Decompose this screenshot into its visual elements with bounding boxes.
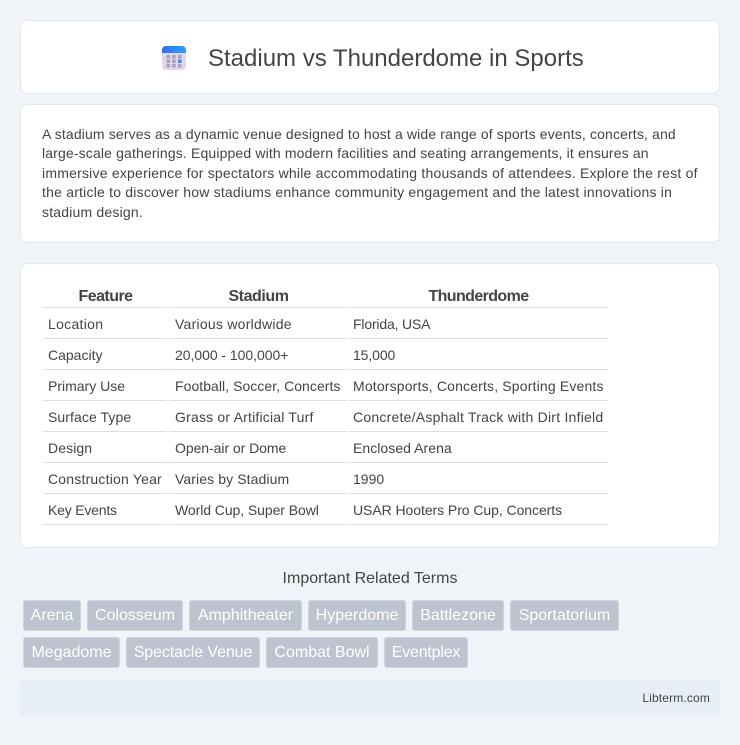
table row: surface type: Grass or Artificial Turf xyxy=(175,409,314,425)
intro text: large-scale gatherings. Equipped with modern facilities and seating arrangements, it ensures an xyxy=(42,145,649,161)
table row: key events xyxy=(43,502,608,525)
intro text: immersive experience for spectators while accommodating thousands of attendees. Explore the rest of xyxy=(42,165,698,181)
related terms tags: Hyperdome xyxy=(316,607,398,624)
title: Stadium vs Thunderdome in Sports xyxy=(208,45,584,72)
intro text: the article to discover how stadiums enhance community engagement and the latest innovations in xyxy=(42,184,672,200)
table row: primary use: Football, Soccer, Concerts xyxy=(175,378,340,394)
heading: related terms: Important Related Terms xyxy=(283,570,457,586)
table row: design: Design xyxy=(48,440,92,456)
intro text: stadium design. xyxy=(42,204,143,220)
table header row xyxy=(43,288,608,308)
table row: primary use: Primary Use xyxy=(48,378,125,394)
table row: key events: USAR Hooters Pro Cup, Concerts xyxy=(353,502,562,518)
table row: key events: World Cup, Super Bowl xyxy=(175,502,319,518)
table row: design: Enclosed Arena xyxy=(353,440,452,456)
table row: location xyxy=(43,316,608,339)
table row: surface type: Concrete/Asphalt Track with Dirt Infield xyxy=(353,409,603,425)
related terms tags: Battlezone xyxy=(420,607,496,624)
table row: primary use: Motorsports, Concerts, Sporting Events xyxy=(353,378,604,394)
icon: calendar xyxy=(162,46,186,70)
table row: construction year: Varies by Stadium xyxy=(175,471,289,487)
related terms tags xyxy=(23,600,619,668)
related terms tags: Combat Bowl xyxy=(274,644,370,661)
related terms tags: Colosseum xyxy=(95,607,175,624)
related terms tags: Eventplex xyxy=(392,644,460,661)
related terms tags: Spectacle Venue xyxy=(134,644,252,661)
panel: comparison table xyxy=(20,263,720,548)
related terms tags: Megadome xyxy=(31,644,112,661)
table row: location: Various worldwide xyxy=(175,316,292,332)
panel: header xyxy=(20,20,720,94)
table row: location: Florida, USA xyxy=(353,316,430,332)
table row: construction year xyxy=(43,471,608,494)
table row: capacity xyxy=(43,347,608,370)
table row: primary use xyxy=(43,378,608,401)
table row: surface type xyxy=(43,409,608,432)
table row: design: Open-air or Dome xyxy=(175,440,286,456)
intro text: A stadium serves as a dynamic venue designed to host a wide range of sports events, concerts, and xyxy=(42,126,676,142)
table row: construction year: 1990 xyxy=(353,471,384,487)
table row: capacity: 15,000 xyxy=(353,347,395,363)
table row: construction year: Construction Year xyxy=(48,471,162,487)
table row: location: Location xyxy=(48,316,103,332)
related terms tags: Arena xyxy=(31,607,73,624)
table header row: Stadium xyxy=(228,288,289,305)
table row: capacity: Capacity xyxy=(48,347,102,363)
related terms tags: Sportatorium xyxy=(519,607,610,624)
intro text xyxy=(42,126,698,220)
footer credit: Libterm.com xyxy=(642,691,710,705)
footer xyxy=(20,681,720,715)
table row: design xyxy=(43,440,608,463)
related terms tags: Amphitheater xyxy=(198,607,293,624)
table row: surface type: Surface Type xyxy=(48,409,131,425)
table row: capacity: 20,000 - 100,000+ xyxy=(175,347,288,363)
table header row: Feature xyxy=(79,288,132,305)
table header row: Thunderdome xyxy=(428,288,529,305)
table row: key events: Key Events xyxy=(48,502,117,518)
panel: introduction xyxy=(20,104,720,243)
